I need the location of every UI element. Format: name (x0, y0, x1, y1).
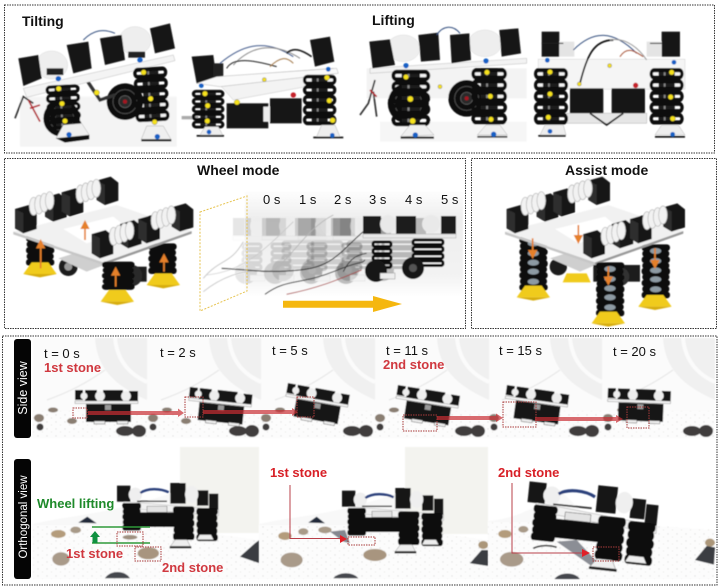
heading: Wheel mode: Wheel mode (197, 162, 280, 178)
label: 2nd stone in side view: 2nd stone (383, 357, 444, 372)
time labels: 0 s to 5 s: 2 s (334, 192, 352, 207)
time labels: side view: t = 11 s (386, 343, 429, 358)
photo: orthogonal frame 2 (259, 447, 488, 579)
markers: green wheel lifting lines and arrow (90, 527, 150, 543)
photo: time-lapse wheel travel sequence (203, 192, 463, 297)
illustration: robot in assist mode with extended legs (505, 177, 685, 327)
photo: orthogonal frame 1 (33, 447, 259, 579)
time labels: 0 s to 5 s: 5 s (441, 192, 459, 207)
photo: lifting side view robot (360, 27, 527, 142)
label: Side view: Side view (16, 360, 30, 415)
time labels: side view: t = 5 s (272, 343, 308, 358)
heading: Tilting: Tilting (22, 13, 64, 29)
heading: Assist mode: Assist mode (565, 162, 648, 178)
time labels: 0 s to 5 s (263, 192, 459, 207)
label: 2nd stone on ground: 2nd stone (162, 560, 223, 575)
label: Orthogonal view (14, 459, 31, 579)
label: 1st stone in side view: 1st stone (44, 360, 101, 375)
panel: stone crossing sequences (2, 336, 717, 585)
photo: tilting side view robot (15, 23, 177, 147)
panel: assist mode (472, 158, 716, 328)
marker: dashed yellow start plane (200, 196, 247, 311)
label: 1st stone under wheel: 1st stone (66, 546, 123, 561)
time labels: 0 s to 5 s: 0 s (263, 192, 281, 207)
arrow: leader to 2nd stone (512, 483, 590, 557)
illustration: robot in wheel mode with raised legs (13, 177, 193, 305)
photos: side view frames (33, 338, 715, 438)
label: 2nd stone in frame 3: 2nd stone (498, 465, 559, 480)
time labels: side view: t = 2 s (160, 345, 196, 360)
time labels: side view (44, 343, 656, 361)
panel: tilting and lifting poses (4, 5, 714, 153)
markers: dashed stone boxes in side view (73, 397, 649, 431)
markers: dashed stone boxes in orthogonal view (117, 532, 619, 561)
arrows: upward orange (36, 220, 169, 287)
time labels: 0 s to 5 s: 1 s (299, 192, 317, 207)
arrow: direction of travel (283, 296, 402, 312)
arrow: leader to 1st stone (290, 485, 347, 543)
label: Orthogonal view: Orthogonal view (18, 475, 30, 559)
photo: lifting front view robot (536, 32, 685, 138)
label: 1st stone in frame 2: 1st stone (270, 465, 327, 480)
photo: tilting front view robot (182, 37, 343, 138)
panel: wheel mode (4, 158, 466, 328)
time labels: side view: t = 15 s (499, 343, 542, 358)
arrows: red progress arrows in side view (88, 408, 623, 423)
time labels: side view: t = 0 s (44, 346, 80, 361)
time labels: side view: t = 20 s (613, 344, 656, 359)
arrows: downward orange (528, 225, 660, 286)
time labels: 0 s to 5 s: 4 s (405, 192, 423, 207)
heading: Lifting: Lifting (372, 12, 415, 28)
photo: orthogonal frame 3 (488, 478, 715, 579)
label: Side view (14, 339, 31, 438)
time labels: 0 s to 5 s: 3 s (369, 192, 387, 207)
label: Wheel lifting: Wheel lifting (37, 496, 114, 511)
